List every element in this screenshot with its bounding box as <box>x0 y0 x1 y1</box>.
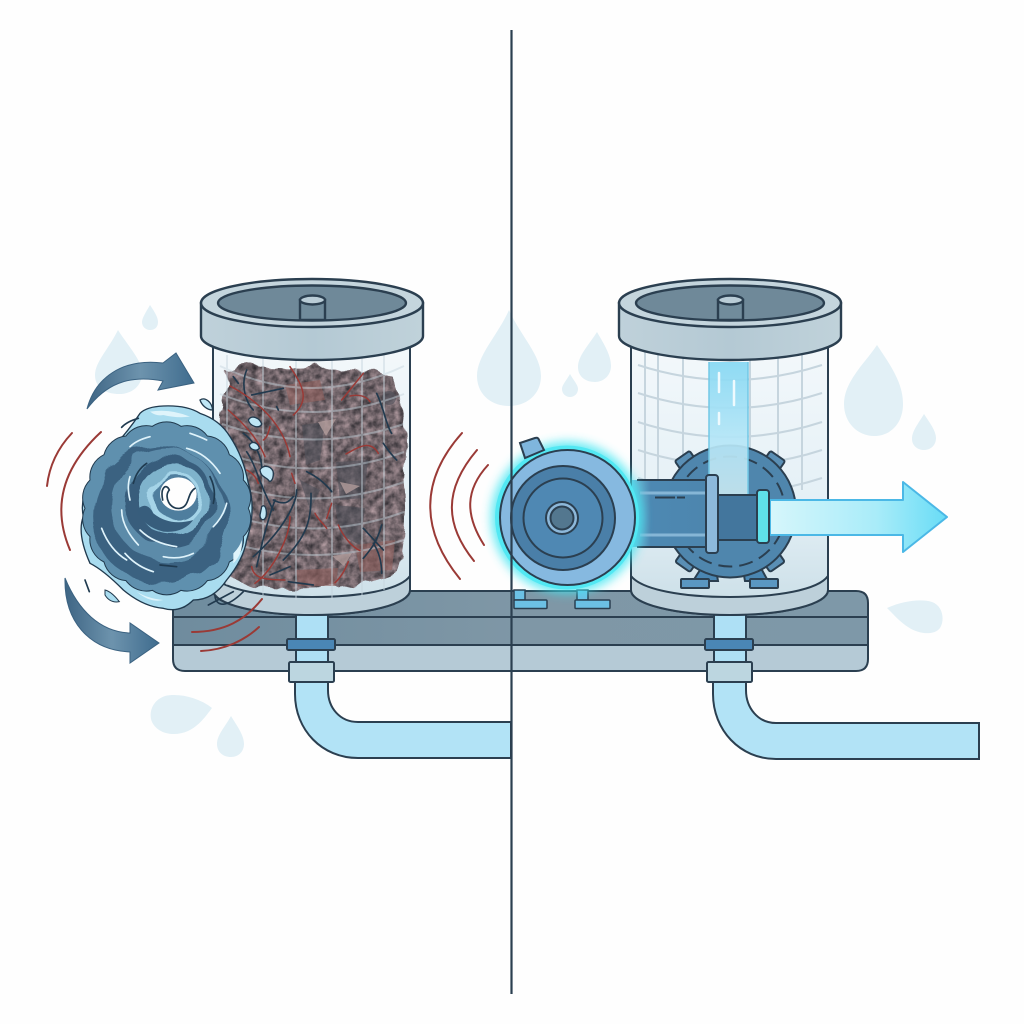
pump with glow <box>491 438 643 594</box>
motor housing <box>664 446 796 588</box>
curved arrow: top <box>87 353 194 409</box>
jar bottom band <box>631 576 828 615</box>
pump feet <box>514 590 610 608</box>
debris mass <box>220 364 406 589</box>
red vibration arcs <box>47 432 488 651</box>
jar body <box>631 345 828 615</box>
dark swirl outlines <box>85 418 214 592</box>
mesh lines <box>638 352 822 493</box>
water column <box>709 362 748 495</box>
outer splash <box>81 406 252 610</box>
clean filter jar <box>619 279 841 615</box>
flow arrow: outlet <box>770 482 947 552</box>
pale splash highlights <box>137 411 242 601</box>
outlet pipe: left <box>287 612 511 758</box>
curved arrow: bottom <box>65 578 159 663</box>
loose water droplet <box>105 590 119 602</box>
top cap <box>619 279 841 360</box>
mesh lines <box>220 350 404 600</box>
scalloped blue body <box>83 422 251 595</box>
dark debris patches <box>300 391 396 545</box>
reddish debris patches <box>285 380 395 586</box>
pump connection pipe <box>632 475 769 553</box>
pump housing <box>500 450 635 585</box>
jar body <box>213 345 410 615</box>
light swirl strokes <box>102 433 227 572</box>
red fibres <box>228 367 378 583</box>
vortex of water <box>81 406 252 610</box>
pale debris flecks <box>318 419 360 566</box>
base plate <box>173 591 868 671</box>
water droplets on debris <box>200 399 273 520</box>
pump tab <box>520 438 544 458</box>
dark blob below eye <box>137 506 193 532</box>
dark fibres <box>173 370 397 607</box>
central divider line <box>510 30 513 994</box>
eye of the vortex <box>160 477 197 511</box>
clogged filter jar <box>173 279 423 615</box>
fibres and hair <box>173 367 397 607</box>
swirl layers <box>92 447 228 583</box>
outlet pipe: right <box>705 612 979 759</box>
jar bottom band <box>213 576 410 615</box>
background water drops <box>95 305 943 757</box>
top cap <box>201 279 423 360</box>
